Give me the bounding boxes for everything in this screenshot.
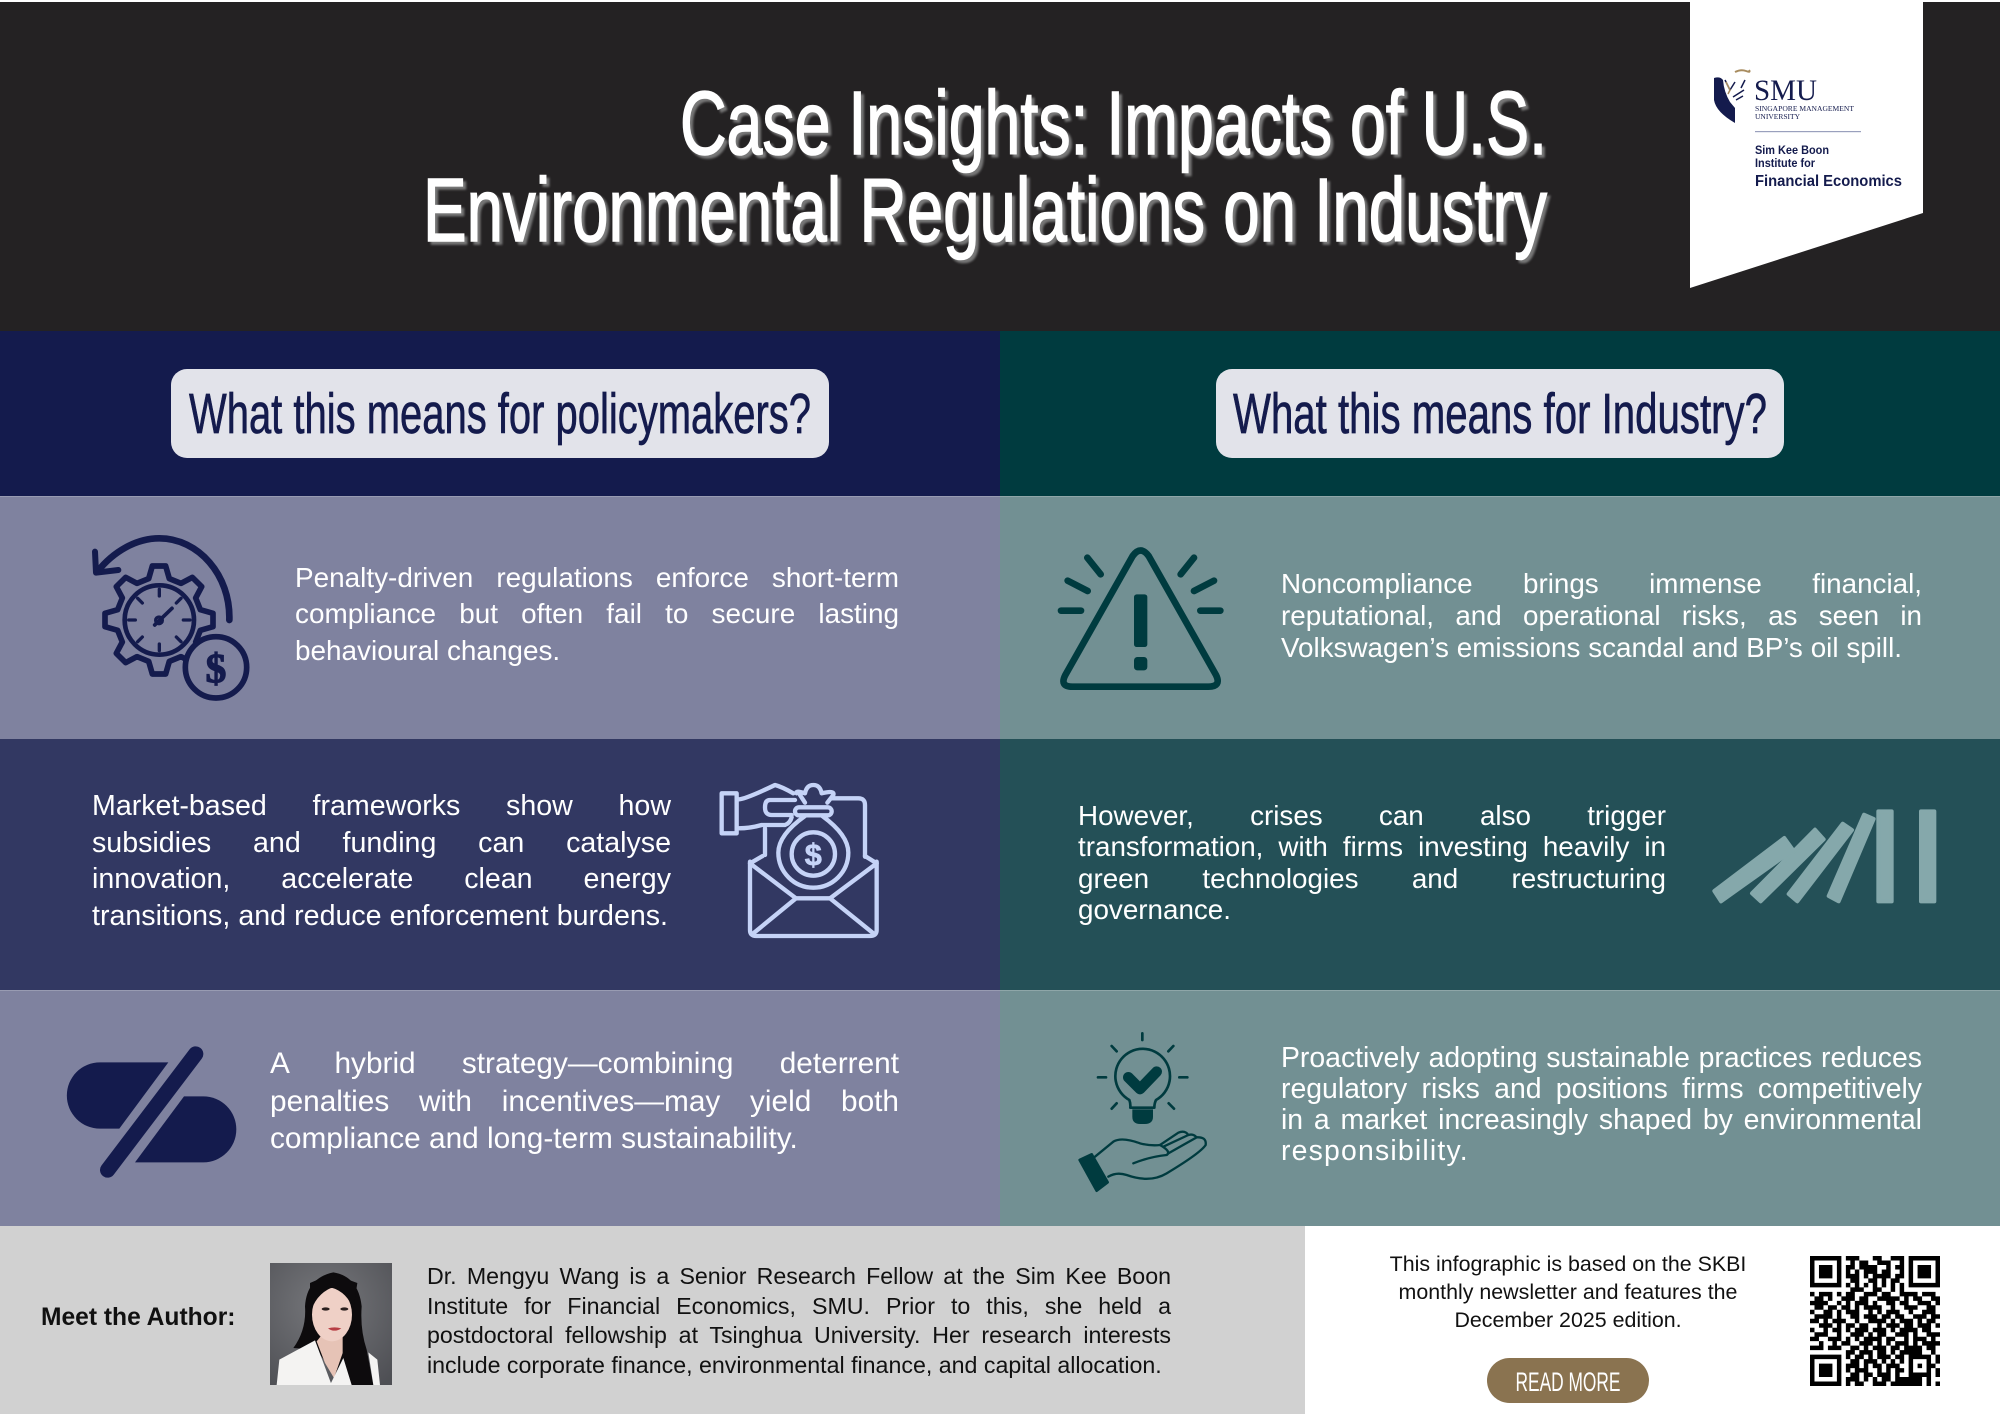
text: proactive sustainable practices: responsibility. [1281, 1135, 1469, 1167]
text: hybrid strategy: compliance and long-term sustainability. [270, 1122, 798, 1155]
text: author bio: Dr. Mengyu Wang is a Senior Research Fellow at the Sim Kee Boon [427, 1263, 1171, 1289]
icon: SMU crest [1714, 70, 1750, 123]
text: market-based frameworks: innovation, accelerate clean energy [92, 863, 671, 895]
text: hybrid strategy: A hybrid strategy—combining deterrent [270, 1047, 899, 1080]
text: noncompliance: Volkswagen’s emissions scandal and BP’s oil spill. [1281, 632, 1902, 663]
logo text: Financial Economics [1755, 173, 1902, 190]
text: market-based frameworks: transitions, and reduce enforcement burdens. [92, 900, 668, 932]
text: penalty regulations [295, 562, 899, 666]
panel: policymakers row 1 [0, 496, 1000, 739]
panel: industry row 2 [1000, 739, 2000, 990]
heading: policymakers [171, 369, 829, 458]
heading: industry [1216, 369, 1784, 458]
text: penalty regulations: compliance but often fail to secure lasting [295, 598, 899, 629]
text: crises trigger transformation: governance. [1078, 894, 1231, 925]
text: noncompliance [1281, 568, 1922, 663]
text: author bio: postdoctoral fellowship at Tsinghua University. Her research interests [427, 1322, 1171, 1348]
text: market-based frameworks: Market-based frameworks show how [92, 790, 671, 822]
logo text [1754, 74, 1902, 190]
text: proactive sustainable practices: Proactively adopting sustainable practices reduces [1281, 1042, 1922, 1074]
text: proactive sustainable practices [1281, 1042, 1922, 1167]
text: author bio: Institute for Financial Economics, SMU. Prior to this, she held a [427, 1293, 1171, 1319]
text: infographic source note [1390, 1252, 1746, 1332]
logo text: SMU [1754, 74, 1817, 107]
text: penalty regulations: behavioural changes. [295, 635, 560, 666]
text: hybrid strategy [270, 1047, 899, 1155]
icon: falling dominoes [1712, 809, 1936, 904]
text: crises trigger transformation: transformation, with firms investing heavily in [1078, 831, 1666, 862]
button: read more [1487, 1358, 1649, 1403]
icon: gear clock with dollar [92, 535, 250, 701]
text: infographic source note: monthly newsletter and features the [1399, 1280, 1737, 1304]
icon: gear clock with dollar: $ [206, 645, 226, 691]
text: market-based frameworks [92, 790, 672, 932]
text: hybrid strategy: penalties with incentives—may yield both [270, 1085, 899, 1118]
panel: industry row 1 [1000, 496, 2000, 739]
text: crises trigger transformation: However, crises can also trigger [1078, 800, 1666, 831]
QR code [1810, 1256, 1940, 1386]
text: crises trigger transformation [1078, 800, 1666, 925]
panel: author footer [0, 1226, 1305, 1414]
panel: policymakers row 2 [0, 739, 1000, 990]
text: crises trigger transformation: green technologies and restructuring [1078, 863, 1666, 894]
text: noncompliance: reputational, and operational risks, as seen in [1281, 600, 1922, 631]
logo text: SINGAPORE MANAGEMENT [1755, 105, 1855, 113]
header band [0, 2, 2000, 331]
panel: policymakers header [0, 331, 1000, 496]
logo text: Sim Kee Boon [1755, 145, 1829, 157]
text: author bio: include corporate finance, environmental finance, and capital allocation. [427, 1352, 1162, 1378]
icon: warning triangle [1058, 547, 1224, 690]
title [423, 74, 1552, 264]
text: infographic source note: This infographic is based on the SKBI [1390, 1252, 1746, 1276]
text: proactive sustainable practices: in a market increasingly shaped by environmental [1281, 1104, 1922, 1136]
text: penalty regulations: Penalty-driven regulations enforce short-term [295, 562, 899, 593]
logo text: Institute for [1755, 158, 1815, 170]
panel: industry header [1000, 331, 2000, 496]
panel: policymakers row 3 [0, 990, 1000, 1226]
text: infographic source note: December 2025 edition. [1454, 1308, 1682, 1332]
text: proactive sustainable practices: regulatory risks and positions firms competitively [1281, 1073, 1922, 1105]
icon: slashed pill [66, 1046, 236, 1178]
text: market-based frameworks: subsidies and funding can catalyse [92, 827, 671, 859]
panel: industry row 3 [1000, 990, 2000, 1226]
text: meet the author: Meet the Author: [41, 1304, 235, 1331]
photo: author portrait [270, 1263, 392, 1385]
logo shield [1690, 2, 1923, 288]
text: noncompliance: Noncompliance brings immense financial, [1281, 568, 1922, 599]
icon: money bag envelope [720, 782, 879, 938]
icon: money bag envelope: $ [805, 838, 822, 872]
logo text: UNIVERSITY [1755, 113, 1800, 121]
text: author bio [427, 1263, 1172, 1378]
icon: lightbulb over hand [1078, 1032, 1207, 1192]
